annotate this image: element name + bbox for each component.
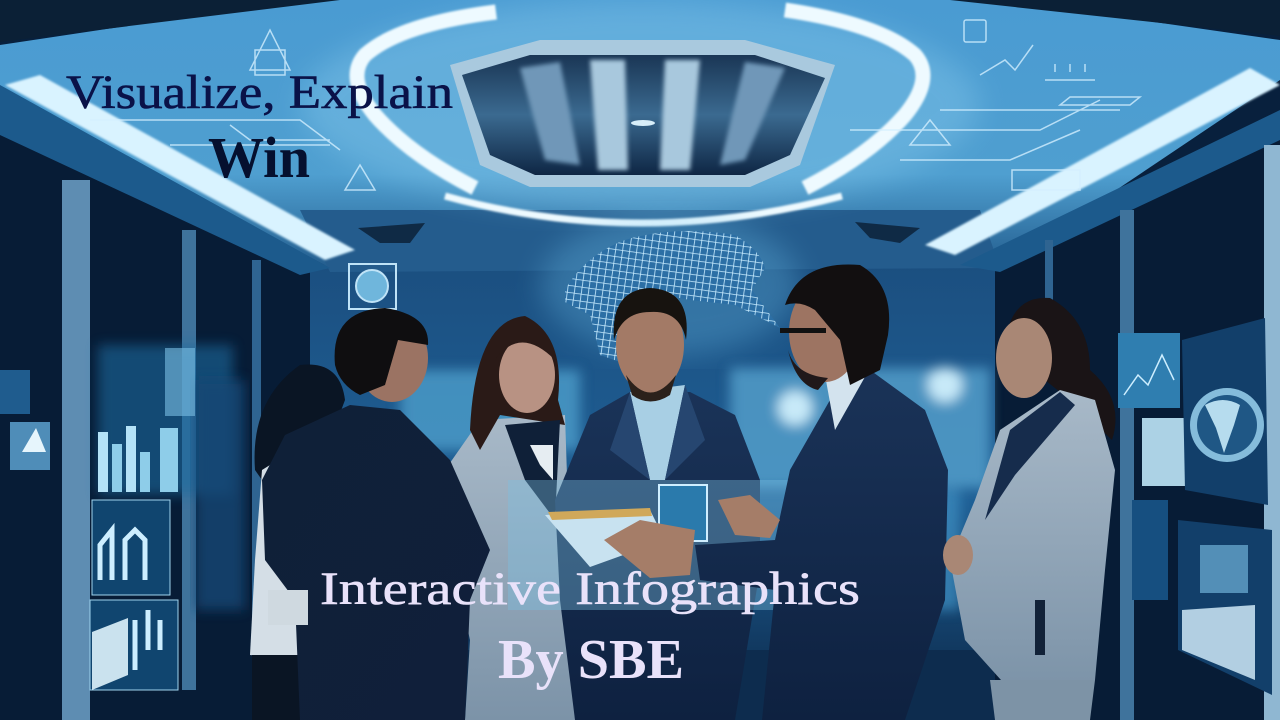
ceiling vent: [450, 40, 835, 187]
man in dark suit, back view: [262, 308, 490, 720]
holographic panel and tablet: [508, 480, 790, 610]
left wall panels: [0, 85, 330, 720]
woman on the right: [943, 298, 1116, 720]
ceiling circuit graphics: [90, 20, 1140, 190]
ceiling: [0, 0, 1280, 272]
man with glasses: [695, 264, 948, 720]
subtitle: Interactive Infographics: Interactive Infographics: [320, 563, 860, 615]
woman at far left: [250, 364, 345, 720]
hologram world map: [540, 215, 800, 362]
light strips: [5, 10, 1280, 260]
right wall panels: [960, 110, 1280, 720]
subtitle: By SBE: By SBE: [498, 629, 684, 691]
title: Visualize, Explain: Visualize, Explain: [66, 66, 453, 119]
back wall screens: [400, 367, 990, 610]
woman in grey blazer: [445, 316, 575, 720]
title: Win: Win: [208, 125, 310, 190]
central man: [555, 288, 760, 720]
icon: wall circle badge: [349, 264, 396, 309]
